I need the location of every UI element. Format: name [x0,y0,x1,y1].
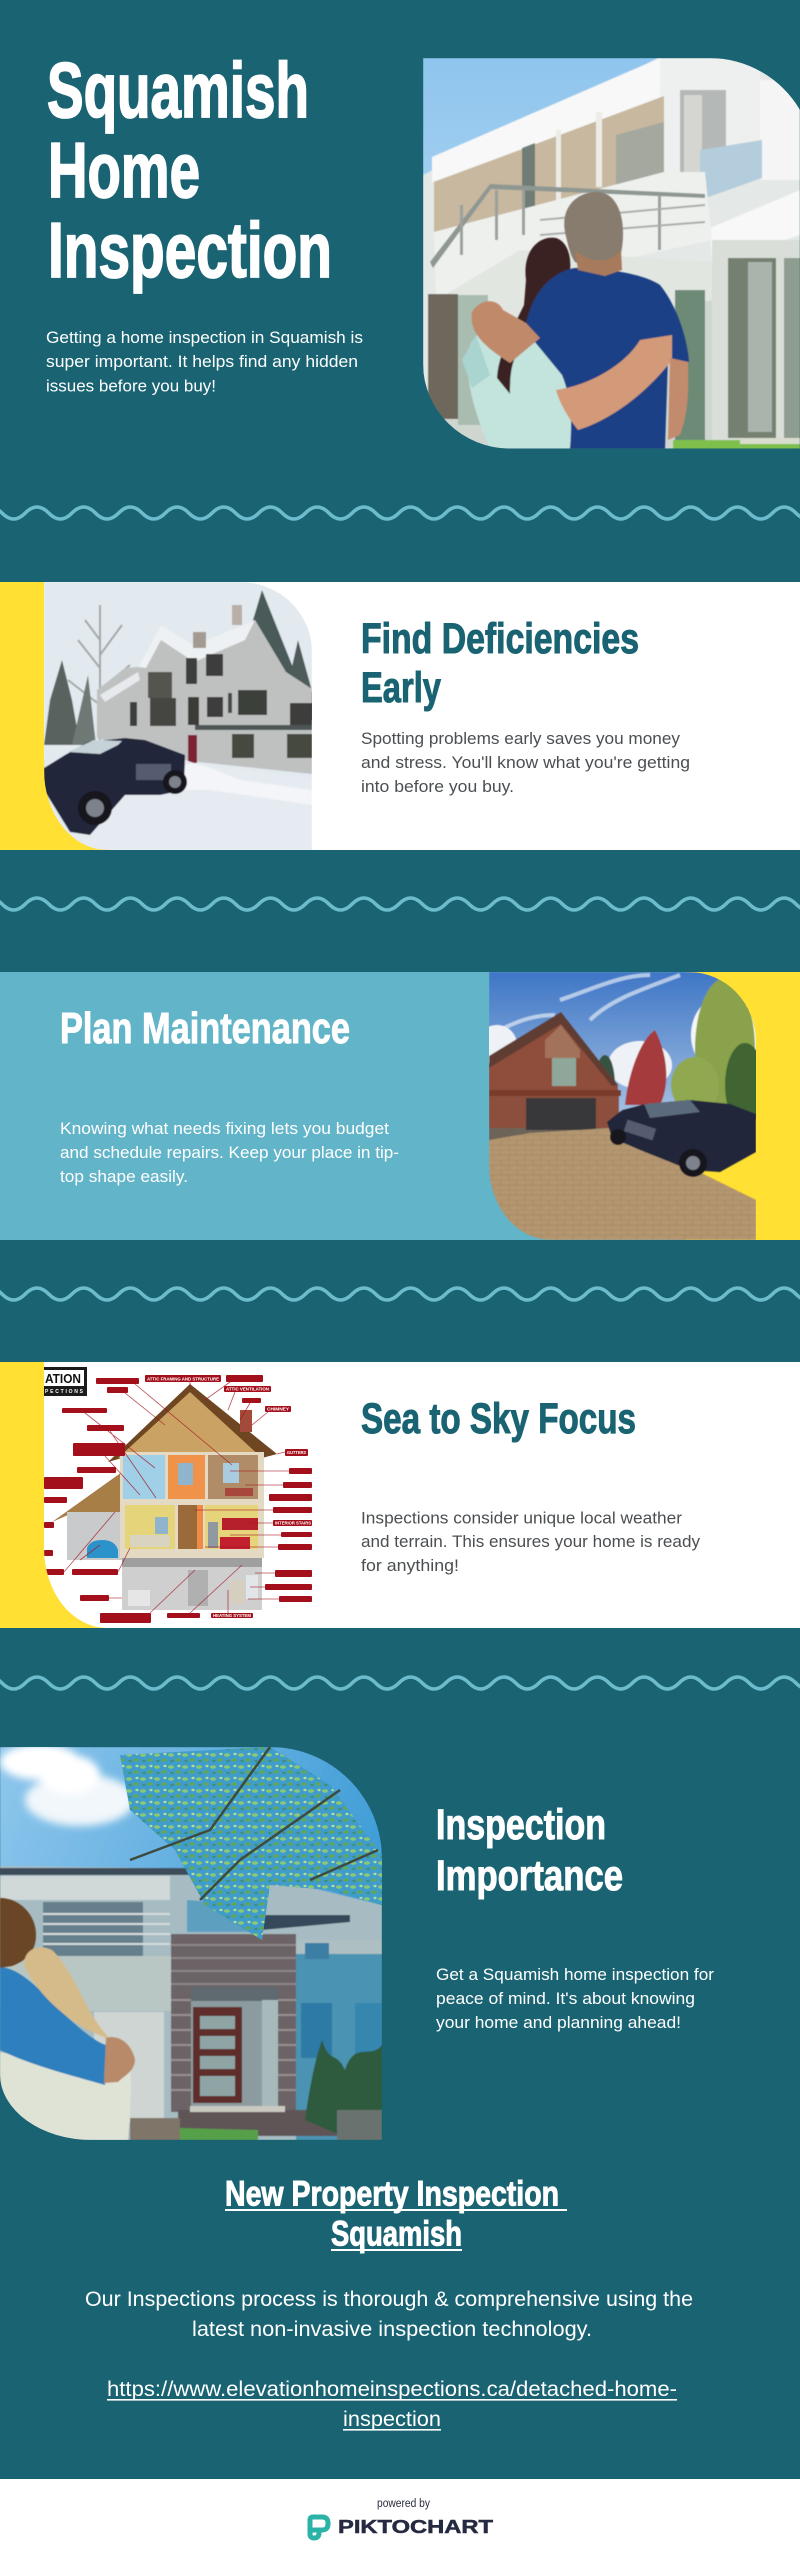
callout labels [44,1375,312,1623]
diagram: house cutaway [40,1362,312,1628]
panel: call to action [85,2174,693,2431]
panel: plan maintenance [0,972,800,1240]
row background [0,1362,800,1628]
powered by: powered by [377,2498,430,2510]
body text [436,1966,715,2032]
cta link: https://www.elevationhomeinspections.ca/detached-home- [107,2378,677,2401]
heading: Sea to Sky Focus [361,1395,636,1443]
body text: and terrain. This ensures your home is ready [361,1533,701,1551]
body text [361,1510,701,1575]
callout labels: HEATING SYSTEM [213,1613,252,1618]
heading: Early [361,664,441,712]
couple [0,1898,135,2140]
heading: Importance [436,1852,623,1900]
body text: top shape easily. [60,1168,188,1186]
callout labels: GUTTERS [287,1450,306,1455]
heading: Find Deficiencies [361,615,639,663]
footer [0,2479,800,2559]
body text: your home and planning ahead! [436,2014,681,2032]
cta heading [225,2174,567,2254]
callout labels: INTERIOR STAIRS [275,1520,311,1526]
intro text: super important. It helps find any hidden [46,353,358,371]
photo: couple embracing in front of brick house [0,1744,382,2140]
body text: peace of mind. It's about knowing [436,1990,695,2008]
photo: couple looking at modern house [423,58,800,449]
logo [40,1367,87,1396]
yellow accent [0,582,44,850]
row background [0,972,800,1240]
leader lines [64,1382,289,1613]
callout labels: ATTIC FRAMING AND STRUCTURE [147,1376,219,1382]
yellow corner [44,760,110,850]
title: Home [48,126,200,214]
yellow accent [0,1362,44,1628]
cta link [107,2378,677,2431]
panel: find deficiencies early [0,582,800,850]
row background [0,582,800,850]
yellow corner [44,1540,110,1628]
logo: PECTIONS [45,1389,84,1395]
cta heading: Squamish [331,2214,462,2254]
title: Inspection [48,206,332,294]
cta text: Our Inspections process is thorough & comprehensive using the [85,2288,693,2311]
heading: Inspection [436,1801,606,1849]
cta heading: New Property Inspection [225,2174,559,2214]
panel: sea to sky focus [0,1362,800,1628]
logo: ATION [45,1371,81,1386]
cta link: inspection [343,2408,441,2431]
body text: Knowing what needs fixing lets you budget [60,1120,389,1138]
body text [361,730,690,796]
photo: timber house with truck [477,972,765,1240]
woman [468,335,572,448]
body text: into before you buy. [361,778,514,796]
intro text [46,329,363,396]
body text: and schedule repairs. Keep your place in tip- [60,1144,399,1162]
house illustration [52,1384,277,1610]
body text [60,1120,399,1186]
man [525,268,689,449]
title [47,46,332,294]
cta text: latest non-invasive inspection technology. [192,2318,592,2341]
intro text: issues before you buy! [46,378,216,396]
yellow accent [685,972,800,1240]
body text: and stress. You'll know what you're getting [361,754,690,772]
callout labels: CHIMNEY [267,1406,289,1412]
title: Squamish [47,46,309,134]
photo: snowy house with truck [44,582,320,850]
cta text [85,2288,693,2341]
heading: Plan Maintenance [60,1004,350,1053]
body text: Inspections consider unique local weather [361,1510,683,1528]
intro text: Getting a home inspection in Squamish is [46,329,363,347]
panel: inspection importance [0,1744,715,2140]
arms [472,301,540,363]
body text: Get a Squamish home inspection for [436,1966,715,1984]
heading [436,1801,623,1900]
tree foliage [120,1747,382,1940]
callout labels: ATTIC VENTILATION [226,1386,269,1392]
icon: piktochart logo [310,2517,328,2538]
heading [361,615,639,712]
body text: for anything! [361,1557,459,1575]
body text: Spotting problems early saves you money [361,730,681,748]
panel: hero [46,46,800,449]
logo wordmark: PIKTOCHART [338,2517,493,2537]
